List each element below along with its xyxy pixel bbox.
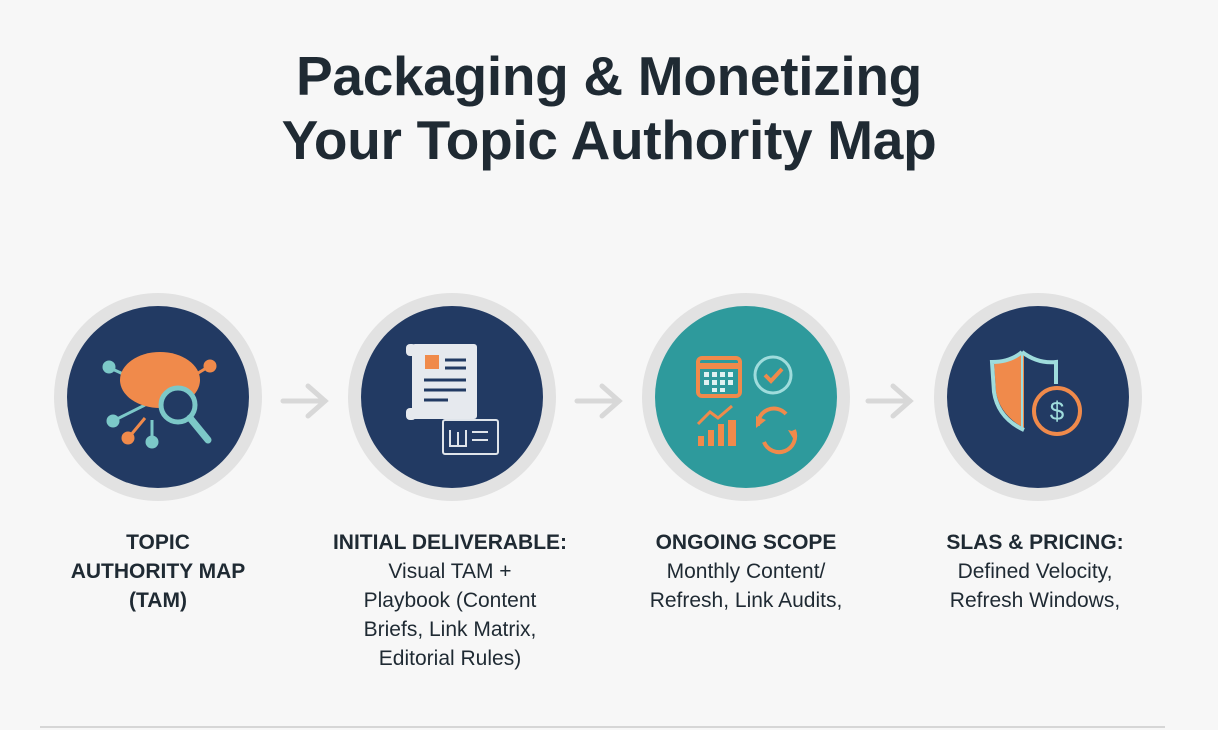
step 3 circle: ongoing icons [642, 293, 850, 501]
label 4: Refresh Windows, [950, 589, 1120, 612]
step 4 circle: shield & dollar icon: $ [1050, 396, 1065, 426]
arrow 3 [868, 386, 910, 416]
label 4: Defined Velocity, [958, 560, 1112, 583]
label 4: SLAS & PRICING: [946, 531, 1124, 554]
label 3: Monthly Content/ [667, 560, 825, 583]
label 2: Playbook (Content [364, 589, 536, 612]
label 2: INITIAL DELIVERABLE: [333, 531, 567, 554]
step 4 circle: shield & dollar icon [934, 293, 1142, 501]
label 2: Visual TAM + [388, 560, 512, 583]
label 2: Editorial Rules) [379, 647, 521, 670]
label 1 [71, 531, 245, 612]
label 1: TOPIC [126, 531, 190, 554]
arrow 1 [283, 386, 325, 416]
title: Packaging & Monetizing [296, 45, 922, 107]
label 3: Refresh, Link Audits, [650, 589, 842, 612]
label 1: (TAM) [129, 589, 187, 612]
title: Your Topic Authority Map [282, 109, 936, 171]
label 4 [946, 531, 1124, 612]
title [282, 45, 936, 171]
label 2: Briefs, Link Matrix, [364, 618, 536, 641]
step 1 circle: brain icon [54, 293, 262, 501]
label 1: AUTHORITY MAP [71, 560, 245, 583]
label 3 [650, 531, 842, 612]
label 3: ONGOING SCOPE [656, 531, 836, 554]
bottom divider [40, 726, 1165, 728]
arrow 2 [577, 386, 619, 416]
step 2 circle: document icon [348, 293, 556, 501]
label 2 [333, 531, 567, 670]
